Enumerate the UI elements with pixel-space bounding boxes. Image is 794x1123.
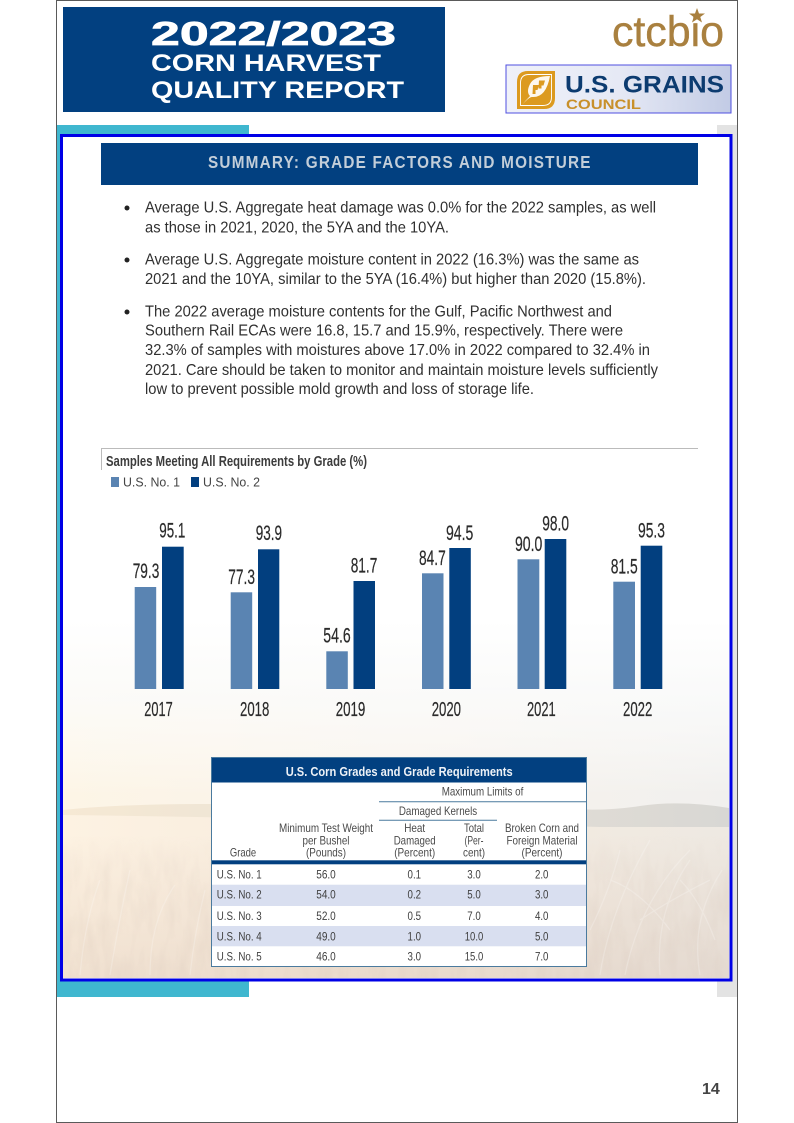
year labels: 2022 — [623, 699, 652, 721]
row: U.S. No. 5: U.S. No. 5 — [217, 949, 262, 963]
bullet 2: 2021 and the 10YA, similar to the 5YA (16.4%) but higher than 2020 (15.8%). — [145, 271, 646, 288]
logo: U.S. Grains Council: U.S. GRAINS — [565, 72, 724, 98]
bullet 3: Southern Rail ECAs were 16.8, 15.7 and 15.9%, respectively. There were — [145, 323, 623, 340]
year labels: 2021 — [527, 699, 556, 721]
row: U.S. No. 4: 1.0 — [408, 929, 421, 943]
column headers: (Pounds) — [306, 846, 346, 860]
row: U.S. No. 3 — [217, 909, 549, 923]
summary bullets — [124, 200, 658, 398]
column headers: Maximum Limits of — [442, 785, 524, 799]
value labels: 54.6 — [323, 625, 351, 648]
bar chart: samples meeting all requirements — [102, 448, 698, 721]
row: U.S. No. 5: 7.0 — [535, 949, 549, 963]
value labels: 81.7 — [351, 555, 377, 578]
year labels — [144, 699, 652, 721]
table rows — [217, 867, 549, 963]
row: U.S. No. 2: U.S. No. 2 — [217, 887, 262, 901]
year labels: 2020 — [432, 699, 461, 721]
year labels: 2019 — [336, 699, 365, 721]
section heading: SUMMARY: GRADE FACTORS AND MOISTURE — [208, 152, 591, 172]
column headers: Total — [464, 821, 484, 835]
row: U.S. No. 4: U.S. No. 4 — [217, 929, 262, 943]
year labels: 2017 — [144, 699, 173, 721]
title banner: QUALITY REPORT — [151, 77, 404, 104]
bullet 3 — [124, 304, 658, 398]
title banner — [63, 7, 445, 112]
column headers: Damaged — [394, 834, 436, 848]
bullet 2 — [124, 252, 646, 288]
title banner: CORN HARVEST — [151, 50, 381, 77]
bullet 1 — [124, 200, 656, 236]
bullet 3: 32.3% of samples with moistures above 17.0% in 2022 compared to 32.4% in — [145, 342, 650, 359]
bullet 1: as those in 2021, 2020, the 5YA and the 10YA. — [145, 220, 449, 236]
column headers — [230, 785, 579, 860]
row: U.S. No. 3: 0.5 — [408, 909, 421, 923]
row: U.S. No. 1: 3.0 — [467, 867, 481, 881]
value labels — [133, 513, 665, 648]
column headers: Heat — [404, 821, 426, 835]
row: U.S. No. 2: 0.2 — [408, 887, 421, 901]
legend: U.S. No. 2 — [203, 474, 260, 490]
value labels: 98.0 — [542, 513, 569, 536]
logo: U.S. Grains Council: COUNCIL — [566, 97, 641, 112]
row: U.S. No. 1: 2.0 — [535, 867, 549, 881]
value labels: 94.5 — [446, 522, 473, 545]
table title — [212, 758, 586, 782]
row: U.S. No. 1: 0.1 — [408, 867, 421, 881]
value labels: 93.9 — [256, 522, 282, 545]
value labels: 77.3 — [228, 566, 255, 589]
row: U.S. No. 3: 52.0 — [316, 909, 336, 923]
row: U.S. No. 1 — [217, 867, 549, 881]
column headers: Minimum Test Weight — [279, 821, 374, 835]
row: U.S. No. 2: 5.0 — [467, 887, 481, 901]
bullet 3: low to prevent possible mold growth and loss of storage life. — [145, 381, 534, 398]
bullet 1: Average U.S. Aggregate heat damage was 0.0% for the 2022 samples, as well — [145, 200, 656, 217]
column headers: (Percent) — [522, 846, 562, 860]
table: U.S. corn grades and grade requirements — [212, 758, 586, 966]
section heading — [101, 143, 698, 185]
column headers: (Percent) — [394, 846, 435, 860]
row: U.S. No. 3: 7.0 — [467, 909, 481, 923]
row: U.S. No. 5: 3.0 — [408, 949, 421, 963]
column headers: per Bushel — [302, 834, 350, 848]
row: U.S. No. 2: 3.0 — [535, 887, 549, 901]
icon: grain leaf — [517, 71, 555, 109]
row: U.S. No. 2: 54.0 — [316, 887, 336, 901]
value labels: 79.3 — [133, 560, 159, 583]
row: U.S. No. 1: 56.0 — [316, 867, 336, 881]
column headers: (Per- — [464, 834, 484, 848]
legend — [111, 474, 260, 490]
row: U.S. No. 4: 5.0 — [535, 929, 549, 943]
value labels: 81.5 — [611, 555, 638, 578]
column headers: Foreign Material — [506, 834, 578, 848]
page number: 14 — [702, 1081, 720, 1098]
row: U.S. No. 3: 4.0 — [535, 909, 549, 923]
value labels: 90.0 — [515, 533, 542, 556]
logo: U.S. Grains Council — [506, 65, 731, 113]
row shading — [212, 885, 586, 906]
logo: ctcbio: ctcbio — [612, 8, 724, 56]
chart title: Samples Meeting All Requirements by Grade (%) — [106, 454, 367, 470]
accent blocks behind the main panel — [57, 125, 737, 997]
year labels: 2018 — [240, 699, 269, 721]
bars — [135, 539, 662, 689]
bullet 3: 2021. Care should be taken to monitor and maintain moisture levels sufficiently — [145, 362, 658, 379]
row: U.S. No. 3: U.S. No. 3 — [217, 909, 262, 923]
legend: U.S. No. 1 — [123, 474, 180, 490]
row: U.S. No. 5 — [217, 949, 549, 963]
row: U.S. No. 4: 49.0 — [316, 929, 336, 943]
bullet 3: The 2022 average moisture contents for the Gulf, Pacific Northwest and — [145, 304, 612, 320]
table title: U.S. Corn Grades and Grade Requirements — [286, 764, 513, 779]
value labels: 95.1 — [159, 520, 185, 543]
column headers: Damaged Kernels — [399, 804, 477, 818]
column headers: Broken Corn and — [505, 821, 579, 835]
row: U.S. No. 4 — [217, 929, 549, 943]
column headers: cent) — [463, 846, 485, 860]
row: U.S. No. 5: 15.0 — [465, 949, 484, 963]
value labels: 84.7 — [419, 547, 446, 570]
row: U.S. No. 5: 46.0 — [316, 949, 336, 963]
row: U.S. No. 1: U.S. No. 1 — [217, 867, 262, 881]
row: U.S. No. 2 — [217, 887, 549, 901]
main panel with field background — [62, 136, 731, 980]
title banner: 2022/2023 — [151, 15, 396, 52]
background: corn field photo — [63, 703, 729, 978]
column headers: Grade — [230, 846, 256, 860]
row: U.S. No. 4: 10.0 — [465, 929, 484, 943]
bullet 2: Average U.S. Aggregate moisture content in 2022 (16.3%) was the same as — [145, 252, 639, 269]
value labels: 95.3 — [638, 519, 665, 542]
